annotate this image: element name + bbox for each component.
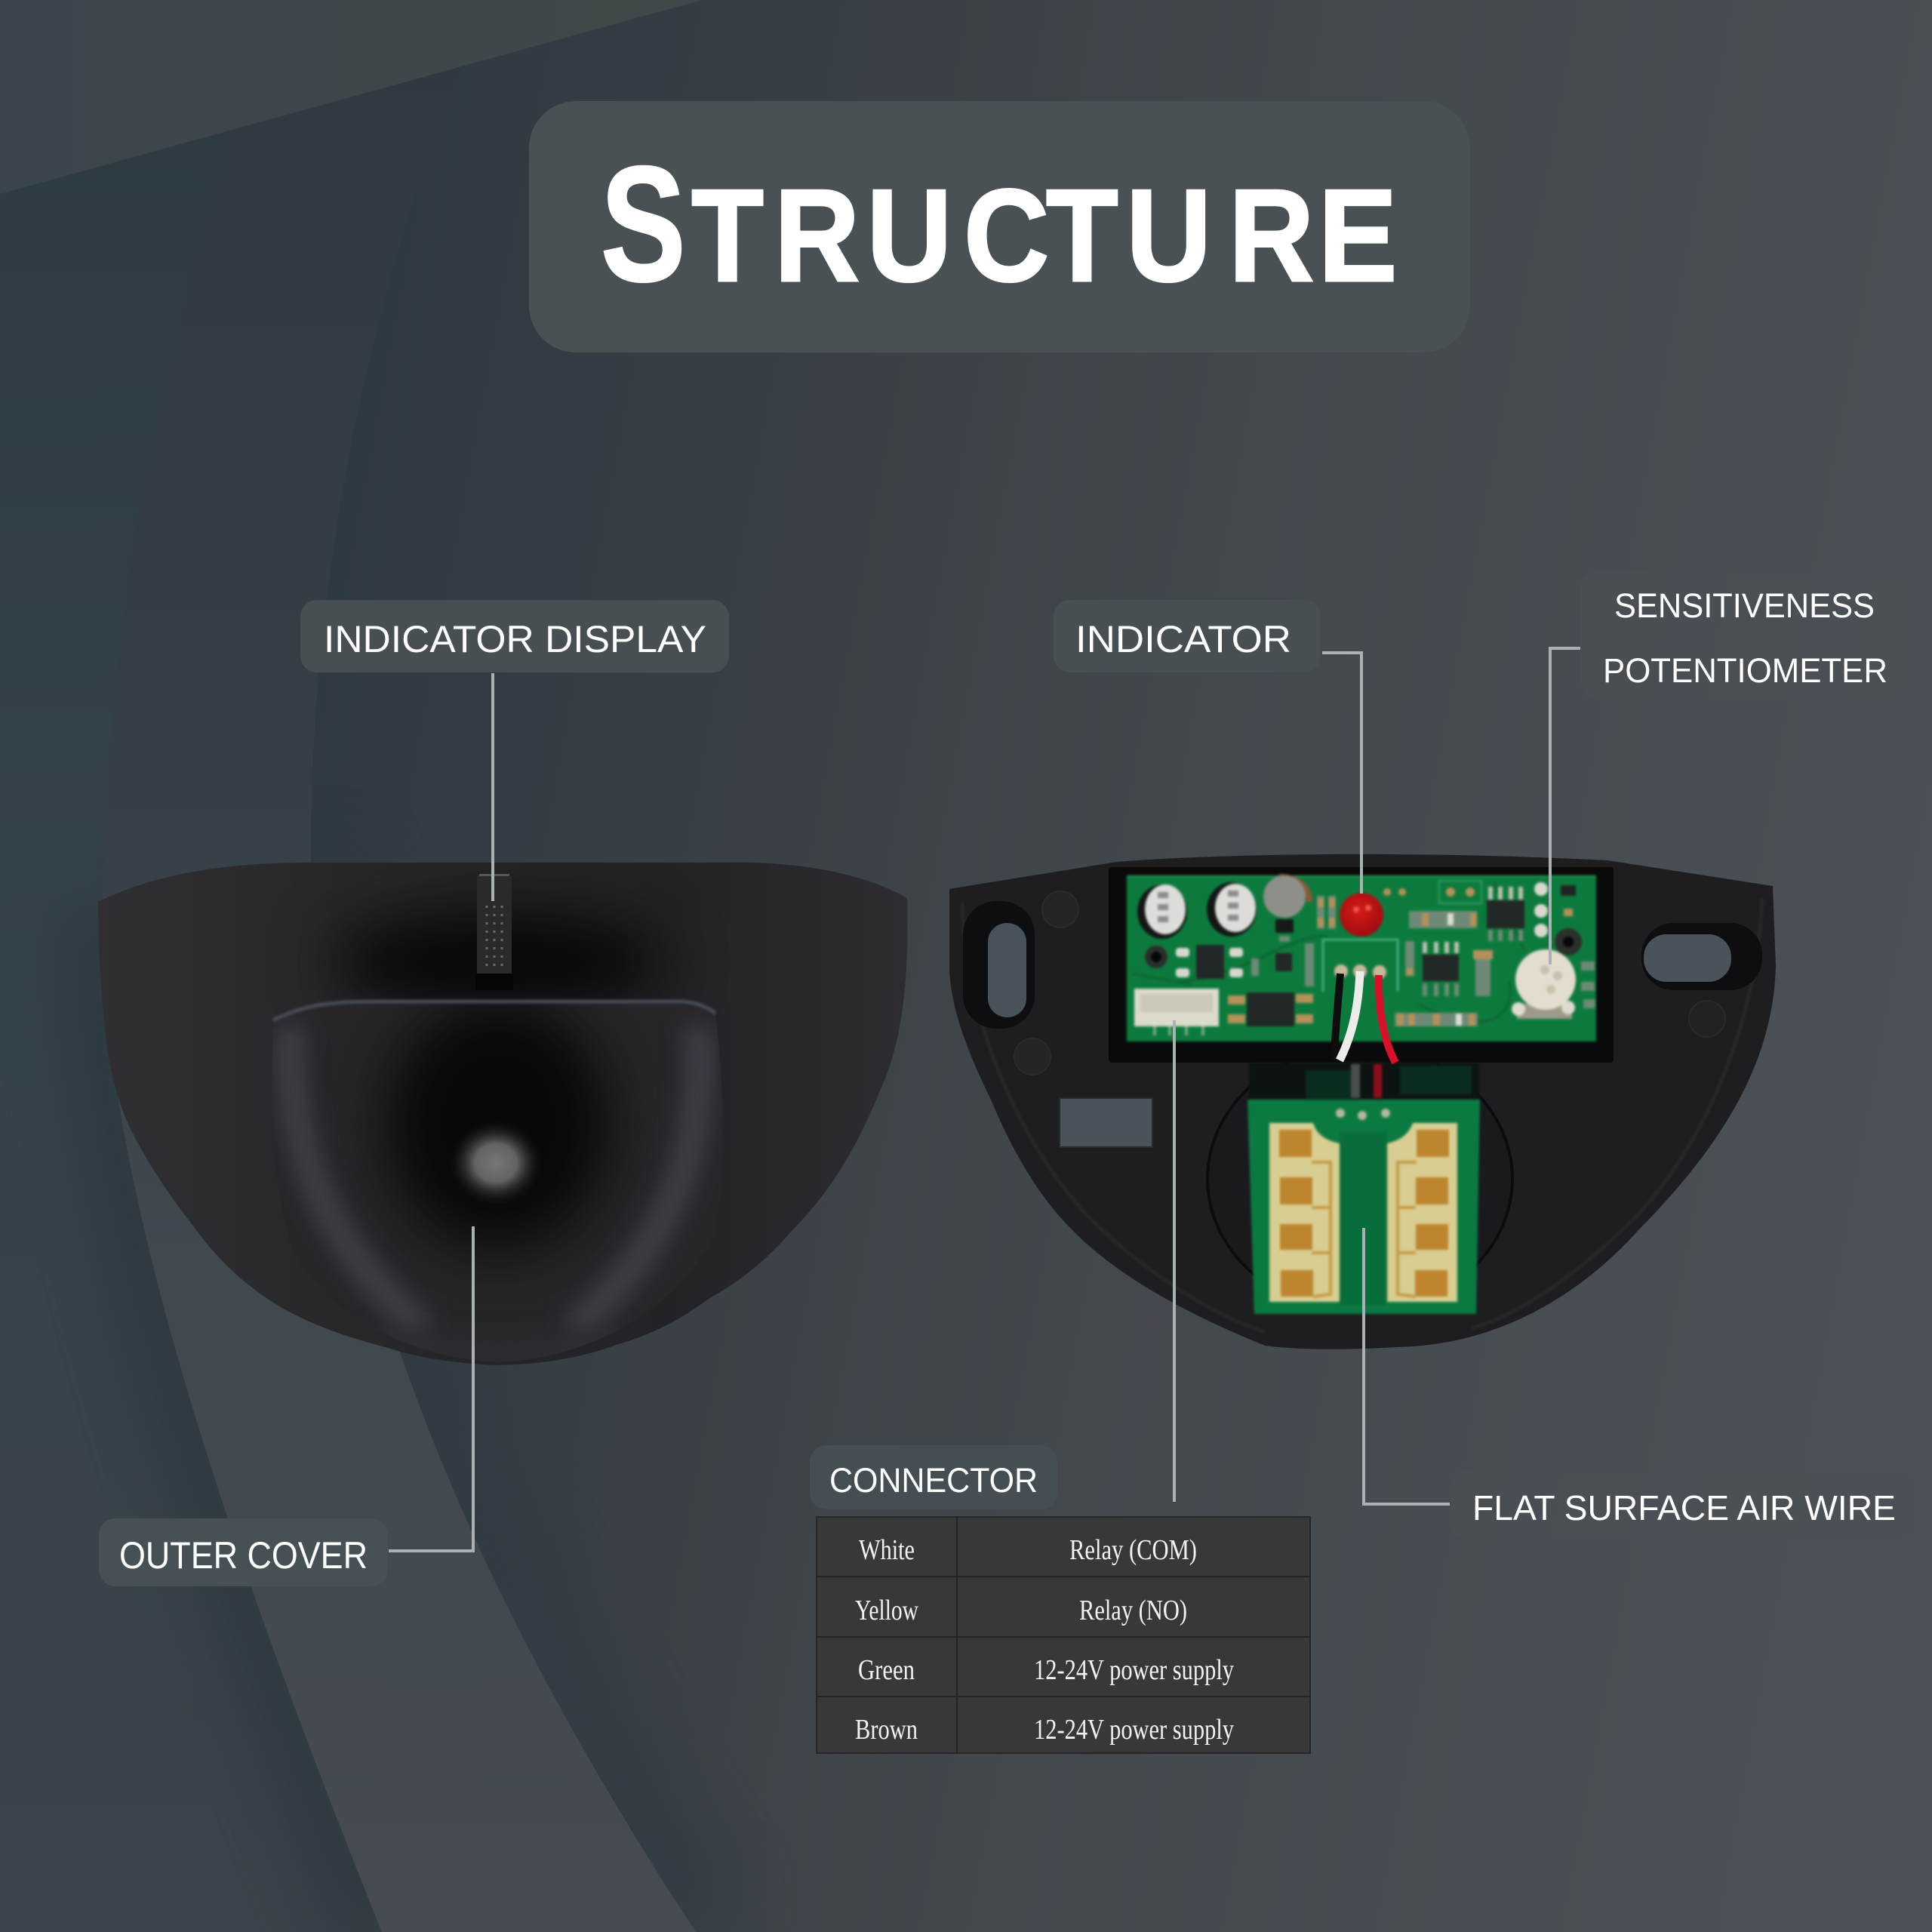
label: connector: CONNECTOR: [829, 1461, 1038, 1500]
chips: [1196, 900, 1524, 1026]
connector table: [817, 1517, 1310, 1753]
row: yellow: [855, 1595, 1187, 1626]
label: indicator: INDICATOR: [1075, 618, 1291, 660]
row: yellow: Yellow: [855, 1595, 918, 1626]
row: brown: Brown: [855, 1714, 918, 1746]
row: white: Relay (COM): [1069, 1534, 1197, 1566]
round recess: [1208, 1046, 1512, 1312]
lower lobe: [273, 1004, 720, 1358]
antenna board: [1247, 1100, 1480, 1314]
board cavity: [1109, 867, 1614, 1063]
row: green: 12-24V power supply: [1034, 1654, 1234, 1686]
wire terminal frame: [1323, 940, 1398, 992]
device: inner base with circuit boards: [949, 854, 1776, 1349]
base shell: [949, 854, 1776, 1349]
lower link strip: [1249, 1063, 1479, 1100]
label: indicator display: [300, 600, 729, 672]
right slot: [1641, 923, 1762, 990]
rectangular opening: [1060, 1098, 1152, 1147]
label: indicator: [1054, 600, 1321, 672]
label: outer cover: OUTER COVER: [119, 1534, 368, 1577]
label: connector: [810, 1445, 1057, 1509]
lens: [449, 1121, 543, 1205]
leader lines: [389, 648, 1580, 1551]
potentiometer: [1512, 949, 1576, 1019]
label: flat surface air wire: [1450, 1472, 1915, 1540]
row: white: [859, 1534, 1197, 1566]
label: flat surface air wire: FLAT SURFACE AIR WIRE: [1472, 1488, 1896, 1527]
row: brown: 12-24V power supply: [1034, 1714, 1234, 1746]
vent display: [475, 874, 513, 990]
wire pads: [1334, 964, 1386, 979]
capacitors: [1137, 882, 1257, 939]
connector socket: [1134, 989, 1219, 1035]
row: brown: [855, 1714, 1234, 1746]
label: outer cover: [99, 1518, 388, 1586]
wires: [1334, 971, 1395, 1063]
main board: [1127, 875, 1596, 1041]
title text: TRUCTURE: [691, 162, 1397, 309]
label: sensitiveness potentiometer: [1580, 571, 1912, 700]
screw bosses: [1042, 891, 1078, 928]
row: green: Green: [858, 1654, 915, 1686]
tan resistors: [1228, 888, 1573, 1026]
left slot: [963, 901, 1035, 1029]
title panel: [529, 101, 1470, 352]
label: indicator display: INDICATOR DISPLAY: [324, 618, 706, 660]
LED: [1340, 893, 1383, 937]
label: sensitiveness potentiometer: SENSITIVENESS: [1614, 586, 1875, 625]
row: yellow: Relay (NO): [1079, 1595, 1187, 1626]
title text: S: [601, 133, 686, 316]
mounting holes: [1145, 928, 1582, 968]
label: sensitiveness potentiometer: POTENTIOMETER: [1603, 651, 1887, 690]
top rim highlight: [423, 857, 664, 859]
header: [1561, 885, 1576, 896]
row: green: [858, 1654, 1234, 1686]
inductor: [1263, 875, 1309, 933]
lobe rim: [273, 1001, 715, 1020]
white pads and leads: [1176, 882, 1548, 977]
device: outer cover: [91, 853, 921, 1374]
row: white: White: [859, 1534, 915, 1566]
